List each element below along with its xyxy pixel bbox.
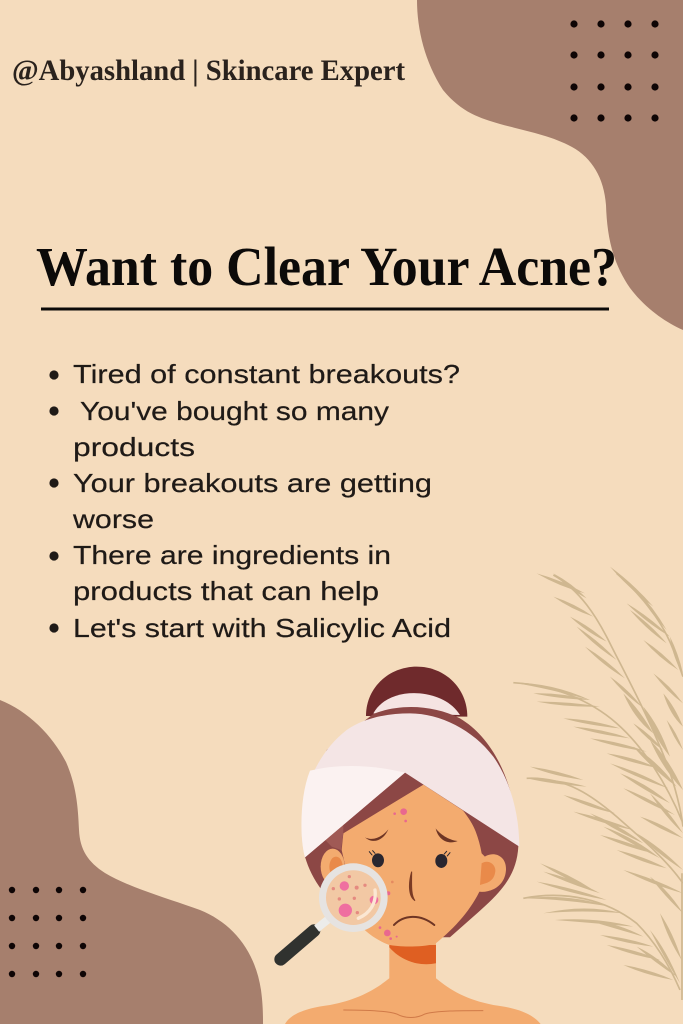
magnifier lens [326,870,381,925]
towel fold [301,766,405,857]
eyelashes [369,851,450,856]
left ear [321,849,345,885]
item 3 line 2: worse [72,504,154,534]
illustration: woman with acne and magnifying glass [281,667,541,1024]
bun towel [373,693,460,715]
frond four barbs [527,767,683,913]
item 3 line 1: Your breakouts are getting [73,468,432,498]
magnifier rim [319,863,388,932]
right eye [435,854,447,868]
hair fringe right [405,773,518,865]
right eyebrow [436,828,458,842]
handle heading: @Abyashland | Skincare Expert [12,54,405,87]
nose [409,872,415,901]
item 4 line 1: There are ingredients in [73,540,391,570]
bottom left dot grid [9,887,86,977]
item 5 text: Let's start with Salicylic Acid [73,613,451,643]
bullet 3 [49,478,59,488]
frond one barbs [537,573,670,757]
neck [285,940,541,1024]
item 1 text: Tired of constant breakouts? [73,359,460,389]
frond two barbs [610,567,683,750]
magnifier neck [317,917,332,929]
frond three barbs [513,683,683,838]
collarbone [343,1010,483,1017]
hair back [305,707,518,937]
mouth [394,917,434,925]
pampas grass [513,567,683,1000]
bullet 4 [49,551,59,561]
magnifier handle [281,931,314,959]
item 4 line 2: products that can help [73,576,379,606]
item 2 line 1: You've bought so many [80,396,389,426]
lens pimples [332,875,378,917]
frond five barbs [523,863,682,983]
bullet 1 [49,370,59,380]
title underline [41,308,609,310]
lens glare [358,890,375,918]
left inner ear [329,857,343,877]
forehead pimples [393,808,407,822]
hair fringe left [305,773,428,885]
left eyebrow [365,829,388,841]
item 2 line 2: products [73,432,195,462]
face [342,782,485,947]
bullet list [49,359,460,643]
top right blob [417,0,683,330]
hair fringe left tuft [323,823,343,850]
hair bun [366,667,467,717]
top right dot grid [570,20,659,122]
towel [301,713,519,857]
right inner ear [480,862,495,885]
right ear [478,854,506,892]
neck shadow [389,945,436,964]
grass stems [513,573,683,1000]
title: Want to Clear Your Acne? [36,236,617,297]
bottom left blob [0,700,263,1024]
cheek and chin pimples [379,881,398,940]
bullet 2 [49,406,59,416]
bullet 5 [49,623,59,633]
left eye [372,853,384,867]
